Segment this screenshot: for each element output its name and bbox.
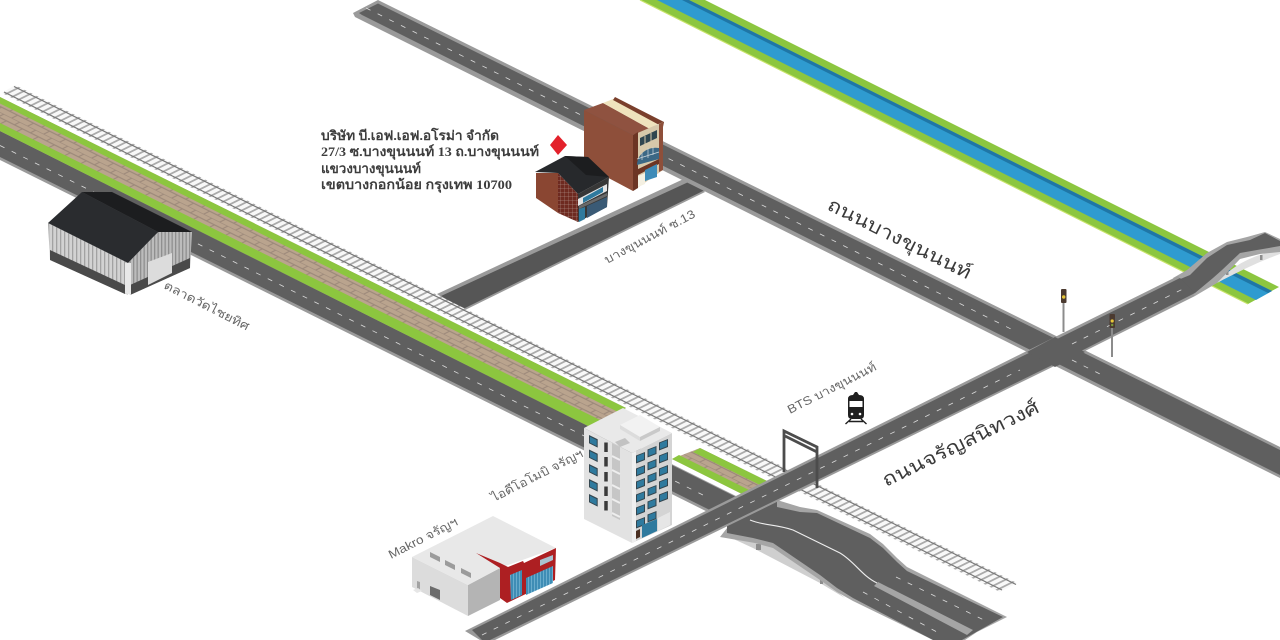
label: Makro: Makro จรัญฯ — [386, 515, 460, 562]
label: Bang Khun Non road: ถนนบางขุนนนท์ — [823, 194, 975, 285]
label: market: ตลาดวัดไชยทิศ — [162, 278, 252, 334]
company address: แขวงบางขุนนนท์ — [321, 161, 421, 177]
icon: location marker diamond — [550, 135, 567, 155]
traffic light north — [1061, 289, 1066, 332]
road: Bang Khun Non main road — [353, 0, 1280, 478]
high-rise: Ideo Mobi Charan — [584, 408, 672, 543]
warehouse: Wat Chaiyathit market — [48, 192, 192, 295]
company address: เขตบางกอกน้อย กรุงเทพ 10700 — [321, 177, 512, 193]
railway track — [2, 85, 1017, 592]
elevated road section south — [720, 498, 1007, 640]
label: BTS station: BTS บางขุนนนท์ — [785, 360, 879, 418]
label: Charan Sanitwong road: ถนนจรัญสนิทวงศ์ — [879, 396, 1043, 491]
river — [640, 0, 1279, 304]
company address: 27/3 ซ.บางขุนนนท์ 13 ถ.บางขุนนนท์ — [321, 144, 539, 160]
elevated road section north — [1173, 232, 1280, 296]
company address — [321, 127, 539, 193]
road: Bang Khun Non Soi 13 — [437, 176, 705, 311]
median strip: left section — [0, 97, 626, 428]
road beside railway — [0, 130, 750, 533]
road: Charan Sanitwong — [465, 276, 1195, 640]
traffic light south — [1110, 314, 1115, 357]
gantry over road — [784, 431, 817, 488]
label: Ideo Mobi: ไอดีโอโมบิ จรัญฯ — [488, 446, 585, 505]
Makro store — [412, 516, 556, 616]
icon: BTS train — [846, 392, 866, 424]
house: old wooden shop — [535, 156, 609, 222]
shophouse: brick building — [584, 97, 664, 191]
company address: บริษัท บี.เอฟ.เอฟ.อโรม่า จำกัด — [321, 127, 499, 143]
label: soi 13: บางขุนนนท์ ซ.13 — [602, 207, 698, 268]
median strip: right section — [672, 448, 767, 494]
